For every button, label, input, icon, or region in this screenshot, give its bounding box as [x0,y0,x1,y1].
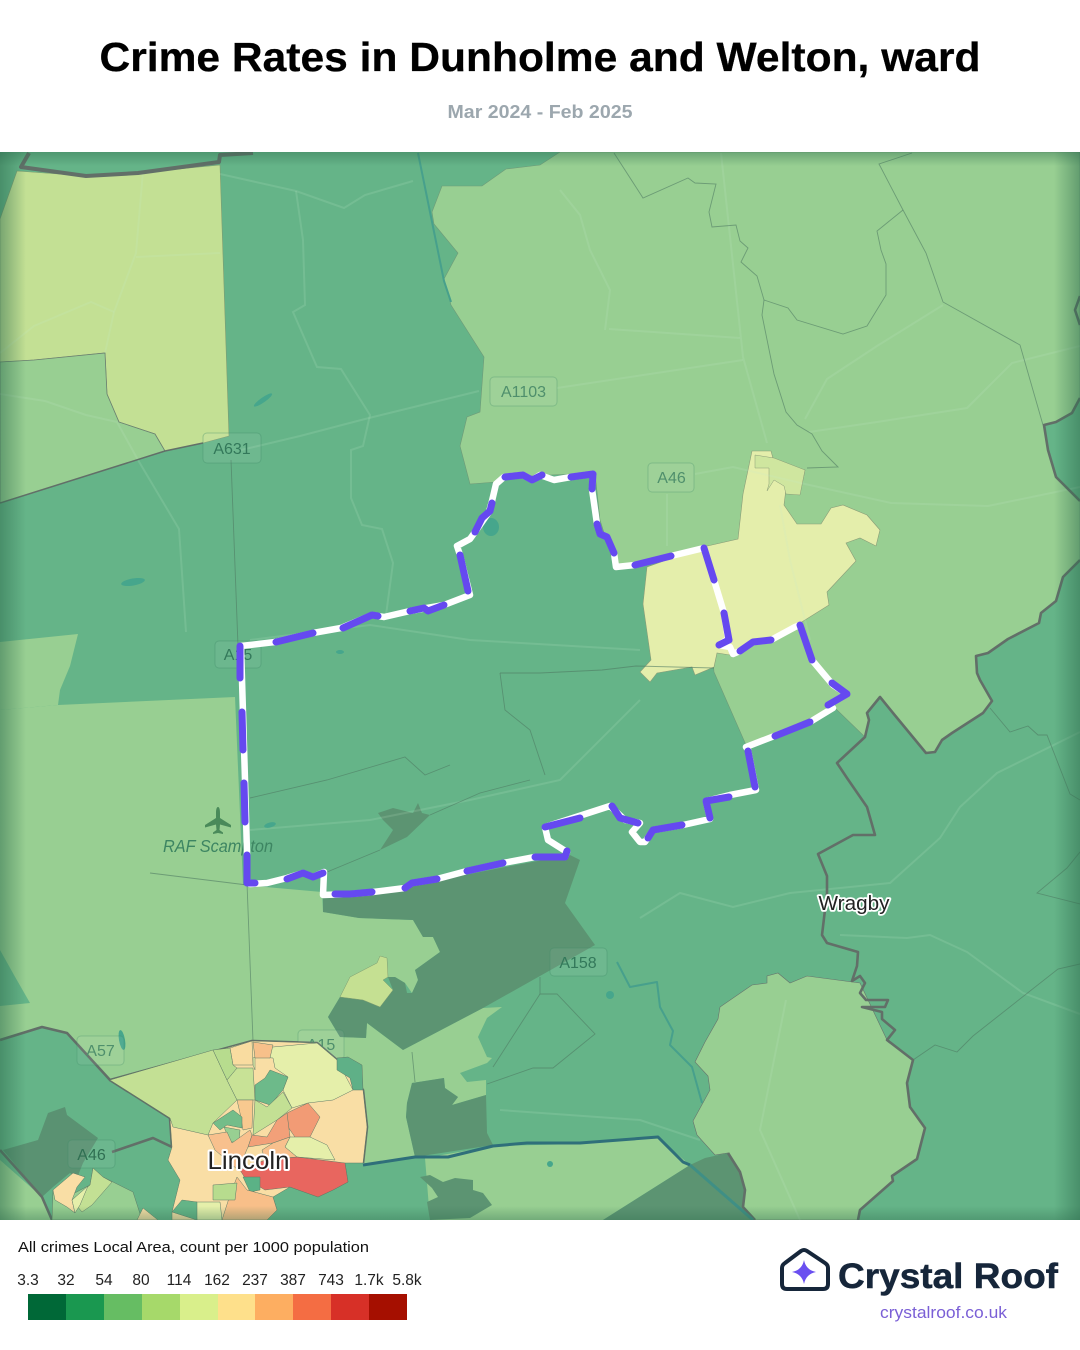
region: pale patch beside dark area [340,956,393,1007]
road label: A46 south [68,1140,115,1168]
logo wordmark: Crystal Roof [838,1257,1058,1296]
logo: Crystal Roof [782,1250,1058,1322]
map rivers [363,153,753,1220]
road label: A57 [77,1036,124,1065]
road label: A46 north: A46 [657,470,686,487]
road label: A46 south: A46 [77,1147,106,1164]
road label: A158: A158 [559,955,597,972]
region: south centre light green below river [425,1138,690,1220]
road label: A46 north [648,463,694,492]
legend tick labels: 80 [132,1272,150,1289]
Lincoln urban area choropleth [110,1041,367,1220]
plane icon: RAF Scampton [205,807,231,834]
region: pale yellow area east of ward [640,451,880,682]
region: west light green area [0,353,165,503]
road label: A15 south [298,1030,344,1060]
road label: A57: A57 [86,1043,115,1060]
map base: medium green areas [0,152,1080,1220]
region: south-west light green area [0,697,502,1165]
region: dark green blob south of river [420,1175,492,1220]
website url: crystalroof.co.uk [880,1304,1008,1322]
road label: A158 [550,948,607,976]
map thin area boundaries [150,153,1080,1084]
legend tick labels [17,1272,422,1289]
region: pale green patch at top of yellow area [755,455,805,495]
region: west edge mid green patch [0,950,30,1006]
region: dark green area west of Lincoln [3,1107,98,1197]
legend [17,1239,422,1320]
legend tick labels: 32 [57,1272,75,1289]
legend colour scale [28,1294,407,1320]
west Lincoln estates choropleth [52,1168,158,1220]
road label: A15 south: A15 [307,1037,335,1054]
road label: A1103 [490,377,557,406]
place label: RAF Scampton: RAF Scampton [163,836,273,856]
ward boundary: white outline [241,474,847,895]
legend tick labels: 5.8k [392,1272,422,1289]
legend tick labels: 162 [204,1272,230,1289]
region: north-east light green area [432,152,1080,753]
road label: A631: A631 [213,441,251,458]
legend tick labels: 1.7k [354,1272,384,1289]
road label: A15 north [215,641,261,668]
legend tick labels: 743 [318,1272,344,1289]
legend title: All crimes Local Area, count per 1000 population [18,1239,369,1256]
road label: A631 [203,433,261,463]
map thick district boundaries [0,153,1080,1220]
legend tick labels: 387 [280,1272,306,1289]
icon: house with star [782,1250,828,1289]
legend tick labels: 54 [95,1272,113,1289]
road label: A15 north: A15 [224,647,252,664]
map water bodies [117,392,614,1167]
region: small west light green area [0,634,78,710]
region: north-west yellow-green area [0,165,229,451]
region: south-east light green area [693,973,925,1220]
place label: Lincoln: Lincoln [208,1147,290,1175]
region: bottom-left light green corner [0,1160,52,1220]
region: dark green south-east corner [603,1153,755,1220]
region: dark green area east of Lincoln [406,1078,493,1157]
legend tick labels: 114 [167,1272,192,1289]
region: small dark patch inside ward [378,803,430,850]
title: Crime Rates in Dunholme and Welton, ward [100,34,980,80]
map roads: faint lighter lines [0,153,1080,1220]
map edge vignette [0,152,1080,1220]
road label: A1103: A1103 [501,384,546,401]
map panel [0,152,1080,1220]
ward boundary: purple dashes [240,474,847,894]
region: dark green low-crime area south of ward [323,855,595,1050]
subtitle: date range: Mar 2024 - Feb 2025 [448,102,632,122]
legend tick labels: 3.3 [17,1272,39,1289]
place label: Wragby: Wragby [818,893,890,915]
legend tick labels: 237 [242,1272,268,1289]
